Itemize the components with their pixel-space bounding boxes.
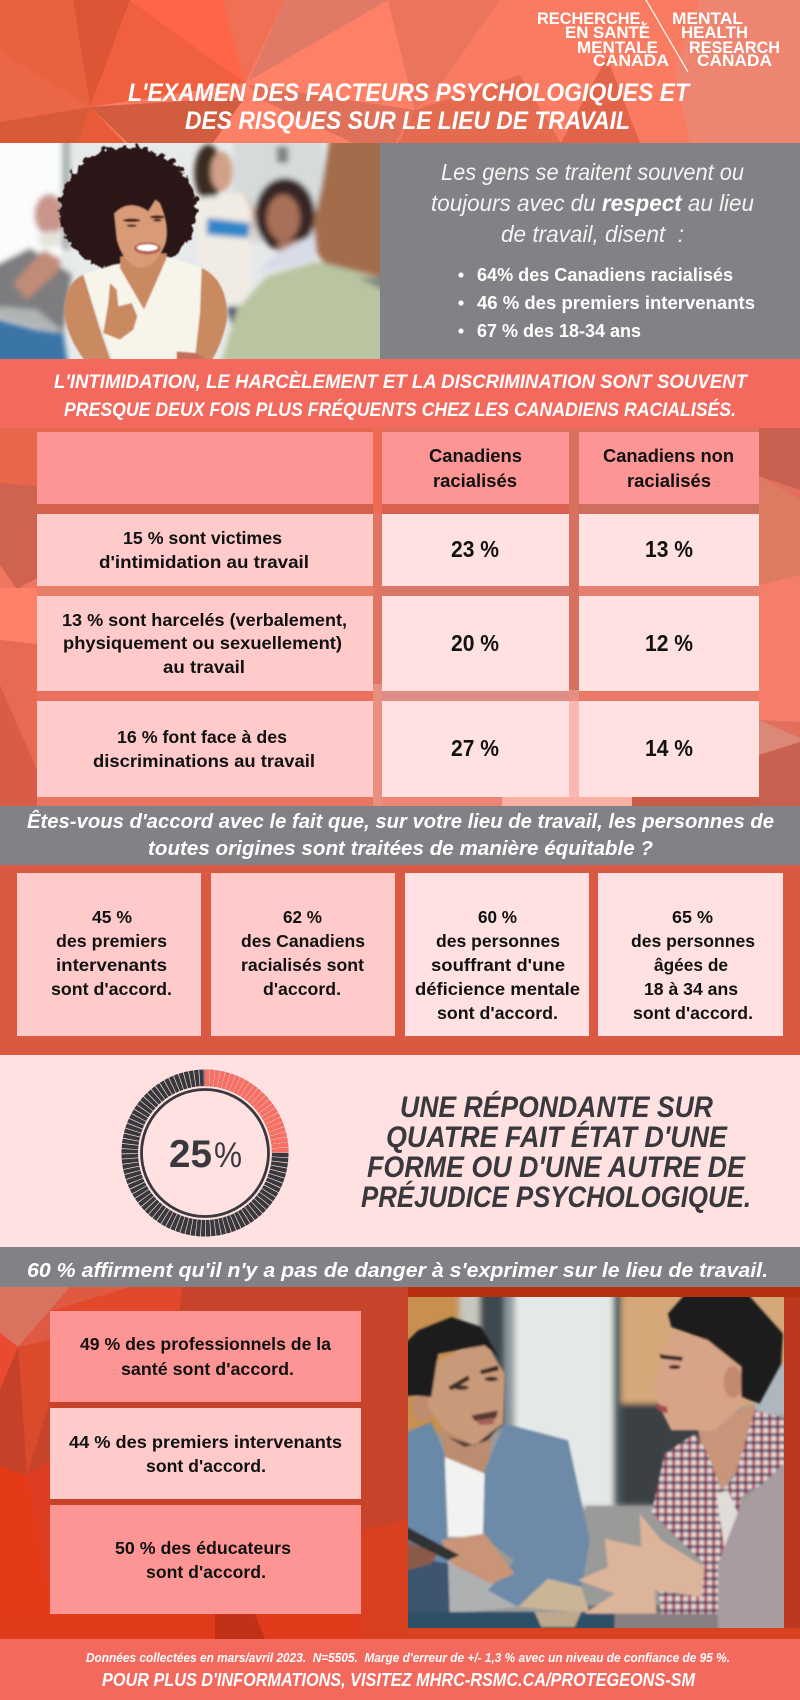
harm statement: FORME OU D'UNE AUTRE DE	[367, 1151, 746, 1184]
header background	[0, 0, 800, 143]
card: educators: 50 % des éducateurs	[115, 1538, 291, 1558]
card: health professionals	[50, 1311, 361, 1402]
table header row: Canadiens non	[603, 446, 734, 466]
card: aged 18 to 34: sont d'accord.	[633, 1003, 753, 1023]
banner: intimidation heading	[0, 359, 800, 428]
panel: agreement cards	[0, 865, 800, 1055]
card: aged 18 to 34: des personnes	[631, 931, 755, 951]
table header row: racialisés	[433, 471, 517, 491]
harm statement: QUATRE FAIT ÉTAT D'UNE	[386, 1120, 728, 1154]
bullet list: 67 % des 18-34 ans	[477, 321, 641, 341]
card: mental impairment	[405, 873, 589, 1036]
skin of arms and chest	[64, 274, 111, 359]
card: aged 18 to 34: 65 %	[672, 907, 713, 927]
banner: fairness question: Êtes-vous d'accord avec le fait que, sur votre lieu de travail, les personnes de	[27, 809, 774, 833]
card: racialized Canadians: racialisés sont	[241, 955, 364, 975]
card: first responders: sont d'accord.	[146, 1456, 266, 1476]
table row: intimidation: 23 %	[451, 536, 499, 562]
card: mental impairment: 60 %	[478, 907, 517, 927]
footer	[0, 1639, 800, 1700]
card: educators: sont d'accord.	[146, 1562, 266, 1582]
card: first responders: 45 %	[92, 907, 132, 927]
card: aged 18 to 34	[598, 873, 783, 1036]
logo: HEALTH	[681, 24, 748, 42]
banner: intimidation heading: L'INTIMIDATION, LE HARCÈLEMENT ET LA DISCRIMINATION SONT SOUVENT	[54, 371, 748, 393]
logo: CANADA	[697, 52, 772, 70]
card: mental impairment: sont d'accord.	[437, 1003, 558, 1023]
table row: discrimination: 16 % font face à des	[117, 727, 287, 747]
table header row	[37, 432, 759, 504]
donut chart: 25%	[130, 1078, 280, 1228]
table row: harassment: 20 %	[451, 630, 499, 656]
card: racialized Canadians	[211, 873, 395, 1036]
logo: RECHERCHE,	[537, 10, 645, 28]
table row: intimidation: 15 % sont victimes	[123, 528, 282, 548]
table header row: Canadiens	[429, 446, 522, 466]
table row: discrimination: discriminations au travail	[93, 751, 315, 771]
banner: intimidation heading: PRESQUE DEUX FOIS PLUS FRÉQUENTS CHEZ LES CANADIENS RACIALISÉS.	[64, 399, 736, 421]
data note: Données collectées en mars/avril 2023. N=5505. Marge d'erreur de +/- 1,3 % avec un niveau de confiance de 95 %.	[86, 1650, 730, 1665]
table row: harassment: au travail	[163, 657, 245, 677]
table row: harassment	[37, 596, 759, 691]
title: L'EXAMEN DES FACTEURS PSYCHOLOGIQUES ET	[128, 79, 691, 107]
donut chart: 25%: %	[214, 1136, 242, 1175]
table row: harassment: 13 % sont harcelés (verbalement,	[62, 610, 347, 630]
card: racialized Canadians: 62 %	[283, 907, 322, 927]
card: first responders	[50, 1408, 361, 1499]
table row: discrimination: 27 %	[451, 735, 499, 761]
panel: respect statistics	[380, 143, 800, 359]
table row: intimidation: 13 %	[645, 536, 693, 562]
respect statement: de travail, disent :	[501, 221, 684, 247]
card: mental impairment: des personnes	[436, 931, 560, 951]
logo: EN SANTÉ	[565, 23, 650, 42]
logo: RESEARCH	[689, 39, 780, 57]
title	[128, 79, 691, 135]
donut chart: 25%: 25	[169, 1133, 212, 1176]
respect statement: toujours avec du respect au lieu	[431, 190, 754, 216]
table header row: racialisés	[627, 471, 711, 491]
banner: fairness question: toutes origines sont traitées de manière équitable ?	[148, 837, 653, 860]
table row: intimidation: d'intimidation au travail	[99, 552, 309, 572]
bullet list: 46 % des premiers intervenants	[477, 293, 755, 313]
card: aged 18 to 34: 18 à 34 ans	[644, 979, 738, 999]
respect statement: Les gens se traitent souvent ou	[441, 159, 744, 185]
logo: CANADA	[593, 52, 669, 70]
card: aged 18 to 34: âgées de	[654, 955, 728, 975]
card: racialized Canadians: des Canadiens	[241, 931, 365, 951]
title: DES RISQUES SUR LE LIEU DE TRAVAIL	[185, 107, 630, 135]
table row: discrimination: 14 %	[645, 735, 693, 761]
card: first responders: intervenants	[56, 955, 167, 975]
table row: harassment: physiquement ou sexuellement)	[63, 633, 342, 653]
card: mental impairment: déficience mentale	[415, 979, 580, 999]
photo: two men talking	[408, 1297, 784, 1628]
logo: MENTALE	[577, 39, 658, 57]
logo: MENTAL	[672, 10, 743, 28]
card: health professionals: santé sont d'accord.	[121, 1359, 294, 1379]
card: health professionals: 49 % des professionnels de la	[80, 1334, 331, 1354]
panel: psychological harm	[0, 1055, 800, 1247]
card: racialized Canadians: d'accord.	[263, 979, 341, 999]
bullet list: 64% des Canadiens racialisés	[477, 265, 733, 285]
card: mental impairment: souffrant d'une	[431, 955, 565, 975]
table row: harassment: 12 %	[645, 630, 693, 656]
card: first responders: 44 % des premiers intervenants	[69, 1432, 342, 1452]
card: first responders: des premiers	[56, 931, 167, 951]
banner: safe to speak: 60 % affirment qu'il n'y a pas de danger à s'exprimer sur le lieu de travail.	[27, 1259, 768, 1282]
logo	[537, 0, 780, 72]
harm statement: UNE RÉPONDANTE SUR	[400, 1090, 713, 1124]
photo: smiling woman in a group	[0, 143, 380, 359]
banner: safe to speak	[0, 1247, 800, 1287]
card: first responders	[17, 873, 201, 1036]
card: first responders: sont d'accord.	[51, 979, 172, 999]
table row: discrimination	[37, 701, 759, 797]
website call to action: POUR PLUS D'INFORMATIONS, VISITEZ MHRC-RSMC.CA/PROTEGEONS-SM	[102, 1670, 696, 1690]
bullet list	[458, 265, 755, 341]
lower section background	[0, 1287, 800, 1639]
banner: fairness question	[0, 806, 800, 865]
table row: intimidation	[37, 514, 759, 586]
respect statement	[431, 159, 754, 247]
card: educators	[50, 1505, 361, 1614]
harm statement	[361, 1090, 751, 1214]
table	[37, 432, 759, 797]
table background	[0, 428, 800, 806]
